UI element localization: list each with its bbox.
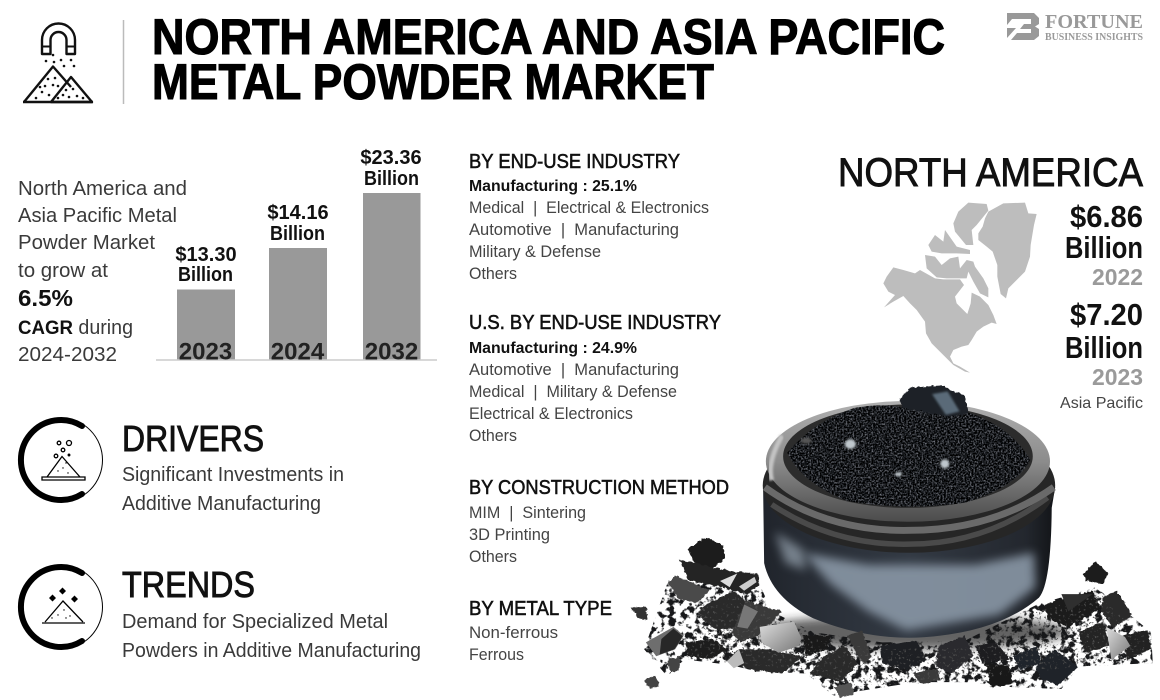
title — [124, 9, 945, 110]
title: NORTH AMERICA AND ASIA PACIFIC — [152, 9, 945, 65]
bar chart: market size: 2024 — [271, 338, 325, 366]
icon: magnet over powder piles — [23, 24, 93, 102]
bar chart: market size: $14.16 — [267, 202, 329, 224]
stat: 2023 value — [1065, 297, 1143, 390]
stat: 2023 value: 2023 — [1092, 364, 1143, 390]
list: construction methods: 3D Printing — [469, 525, 550, 544]
list: construction methods: MIM | Sintering — [469, 503, 586, 522]
heading: by construction method: BY CONSTRUCTION METHOD — [469, 477, 729, 499]
heading: trends: TRENDS — [122, 564, 255, 605]
jar rim — [766, 401, 1050, 522]
jar thread band — [763, 418, 1055, 553]
image: jar of metal powder with rock fragments — [630, 386, 1153, 698]
text block: trends description: Powders in Additive Manufacturing — [122, 640, 421, 662]
list: end-use industries: Military & Defense — [469, 242, 601, 261]
list: end-use industries: Others — [469, 264, 517, 283]
powder glints — [801, 438, 949, 476]
heading: U.S. by end-use industry: U.S. BY END-USE INDUSTRY — [469, 312, 721, 334]
crumbled powder — [644, 580, 1153, 696]
jar inner wall — [783, 404, 1033, 508]
list: U.S. end-use industries: Others — [469, 426, 517, 445]
text block: market growth summary: Powder Market — [18, 232, 155, 254]
bar chart: market size: $13.30 — [175, 244, 237, 266]
text block: drivers description: Additive Manufacturing — [122, 493, 321, 515]
text block: market growth summary: to grow at — [18, 260, 108, 282]
jar body highlight — [803, 553, 1036, 630]
list: metal types: Non-ferrous — [469, 623, 558, 642]
heading: drivers: DRIVERS — [122, 418, 264, 459]
bar chart: market size: 2023 — [179, 338, 232, 366]
stat: 2022 value — [1065, 199, 1143, 290]
list: U.S. end-use industries: Manufacturing : 24.9% — [469, 340, 637, 357]
list: construction methods — [469, 503, 586, 566]
logo: Fortune Business Insights: BUSINESS INSIGHTS — [1045, 32, 1143, 43]
map: North America silhouette — [883, 203, 1037, 373]
shadow under jar — [751, 615, 1068, 649]
gray speckle on crumbs — [686, 591, 1144, 687]
light rock facets — [646, 573, 1130, 668]
list: U.S. end-use industries: Electrical & Electronics — [469, 404, 633, 423]
stat: 2022 value: $6.86 — [1070, 199, 1143, 234]
bar chart: market size — [156, 147, 437, 366]
heading: by metal type: BY METAL TYPE — [469, 598, 612, 620]
list: metal types: Ferrous — [469, 645, 524, 664]
list: U.S. end-use industries — [469, 340, 679, 445]
icon: drivers badge — [20, 418, 102, 502]
title: METAL POWDER MARKET — [152, 54, 714, 110]
logo: Fortune Business Insights: FORTUNE — [1045, 11, 1143, 33]
list: U.S. end-use industries: Automotive | Manufacturing — [469, 360, 679, 379]
jar body — [763, 487, 1055, 638]
stat: 2023 value: Billion — [1065, 330, 1143, 365]
logo: Fortune Business Insights — [1007, 11, 1143, 43]
bar chart: market size: $23.36 — [360, 147, 422, 169]
bar chart: market size: Billion — [178, 264, 233, 286]
bar chart: market size: Billion — [270, 223, 325, 245]
icon: trends badge — [20, 565, 102, 649]
list: end-use industries: Automotive | Manufacturing — [469, 220, 679, 239]
text block: market growth summary: 6.5% — [18, 285, 73, 311]
text block: market growth summary: North America and — [18, 178, 187, 200]
rock fragments — [630, 537, 1151, 698]
list: metal types — [469, 623, 558, 664]
text block: drivers description — [122, 464, 344, 515]
stat: 2022 value: 2022 — [1092, 264, 1143, 290]
powder mound peak — [899, 386, 968, 417]
heading: by end-use industry: BY END-USE INDUSTRY — [469, 151, 680, 173]
list: U.S. end-use industries: Medical | Military & Defense — [469, 382, 677, 401]
text block: market growth summary: CAGR during — [18, 317, 133, 339]
label: Asia Pacific: Asia Pacific — [1060, 395, 1143, 412]
text block: trends description — [122, 611, 421, 662]
text block: trends description: Demand for Specialized Metal — [122, 611, 388, 633]
stat: 2022 value: Billion — [1065, 230, 1143, 265]
bar chart: market size: Billion — [364, 168, 419, 190]
stat: 2023 value: $7.20 — [1070, 297, 1143, 332]
list: construction methods: Others — [469, 547, 517, 566]
list: end-use industries: Manufacturing : 25.1% — [469, 178, 637, 195]
list: end-use industries: Medical | Electrical & Electronics — [469, 198, 709, 217]
list: end-use industries — [469, 178, 709, 283]
bar chart: market size: 2032 — [365, 338, 418, 366]
text block: drivers description: Significant Investments in — [122, 464, 344, 486]
powder surface — [787, 405, 1030, 507]
text block: market growth summary: 2024-2032 — [18, 344, 117, 366]
text block: market growth summary: Asia Pacific Metal — [18, 205, 177, 227]
text block: market growth summary — [18, 178, 187, 366]
